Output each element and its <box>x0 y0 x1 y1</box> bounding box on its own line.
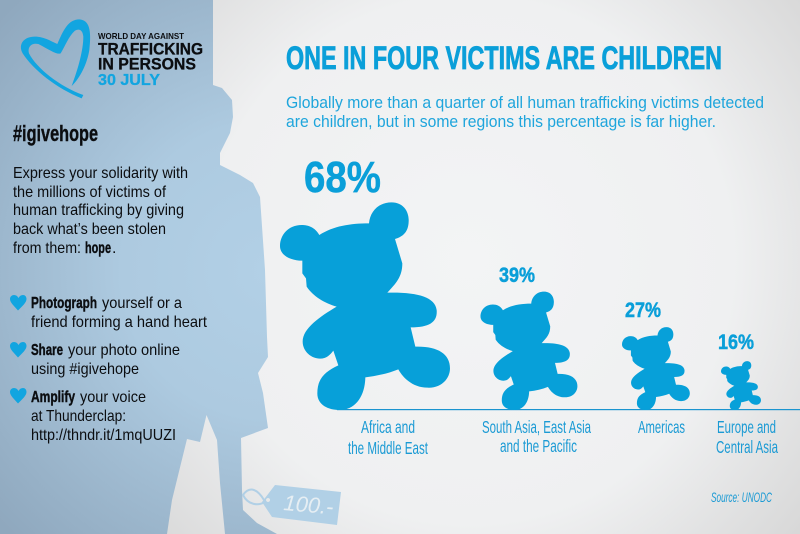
text block: solidarity message: hope <box>85 240 111 257</box>
icon: heart bullet <box>10 295 26 310</box>
logo: World Day Against Trafficking: IN PERSONS <box>98 56 196 74</box>
label: the Middle East <box>348 438 428 458</box>
text block: solidarity message: back what’s been stolen <box>13 221 166 238</box>
text block: solidarity message: from them: <box>13 240 81 257</box>
label <box>348 417 428 458</box>
list item: photograph: friend forming a hand heart <box>31 314 208 331</box>
label <box>716 417 778 457</box>
logo: World Day Against Trafficking: 30 JULY <box>98 72 160 89</box>
percentage 27: 27% <box>625 299 661 322</box>
list item: share: using #igivehope <box>31 361 139 378</box>
percentage 39: 39% <box>499 264 535 287</box>
percentage 68: 68% <box>304 153 381 202</box>
tag price: 100.- <box>283 490 335 519</box>
heading: #igivehope: #igivehope <box>13 121 98 146</box>
list item: amplify: your voice <box>80 389 146 406</box>
list item: photograph: yourself or a <box>102 295 182 312</box>
text block: solidarity message: human trafficking by giving <box>13 202 184 219</box>
icon: teddy bear <box>480 292 577 410</box>
list item: share <box>10 342 180 378</box>
chart item: Africa and the Middle East <box>280 153 450 458</box>
baseline <box>337 409 800 410</box>
text block: solidarity message <box>13 165 188 257</box>
list item: photograph <box>10 295 208 331</box>
text block: intro: are children, but in some regions this percentage is far higher. <box>286 113 716 131</box>
label <box>482 417 591 456</box>
icon: heart bullet <box>10 388 26 404</box>
label: Americas <box>638 417 685 437</box>
text block: intro: Globally more than a quarter of all human trafficking victims detected <box>286 94 764 112</box>
logo: World Day Against Trafficking <box>21 19 203 98</box>
list item: photograph: Photograph <box>31 295 97 312</box>
list item: share: Share <box>31 342 63 359</box>
chart item: South Asia, East Asia and the Pacific <box>480 264 591 456</box>
icon: heart bullet <box>10 342 26 358</box>
label: and the Pacific <box>500 436 577 456</box>
list item: amplify <box>10 388 176 444</box>
label: Africa and <box>361 417 415 437</box>
icon: price tag <box>243 485 341 525</box>
logo text: WORLD DAY AGAINST <box>98 31 185 41</box>
text block: solidarity message: . <box>112 240 116 257</box>
icon: teddy bear large <box>280 202 450 410</box>
label: South Asia, East Asia <box>482 417 591 437</box>
list item: amplify: at Thunderclap: <box>31 408 126 425</box>
panel: left sidebar with child silhouette <box>0 0 277 534</box>
percentage 16: 16% <box>718 331 754 354</box>
icon: teddy bear <box>622 327 690 410</box>
logo: World Day Against Trafficking: TRAFFICKING <box>98 40 203 58</box>
icon: teddy bear small <box>721 361 761 410</box>
list item: share: your photo online <box>68 342 180 359</box>
list item: amplify: http://thndr.it/1mqUUZI <box>31 427 176 444</box>
text block: intro <box>286 94 764 131</box>
chart item: Europe and Central Asia <box>716 331 778 457</box>
icon: heart outline <box>21 19 90 98</box>
text block: solidarity message: Express your solidarity with <box>13 165 188 182</box>
text block: solidarity message: the millions of victims of <box>13 184 167 201</box>
chart item: Americas <box>622 299 690 437</box>
list item: amplify: Amplify <box>31 389 75 406</box>
